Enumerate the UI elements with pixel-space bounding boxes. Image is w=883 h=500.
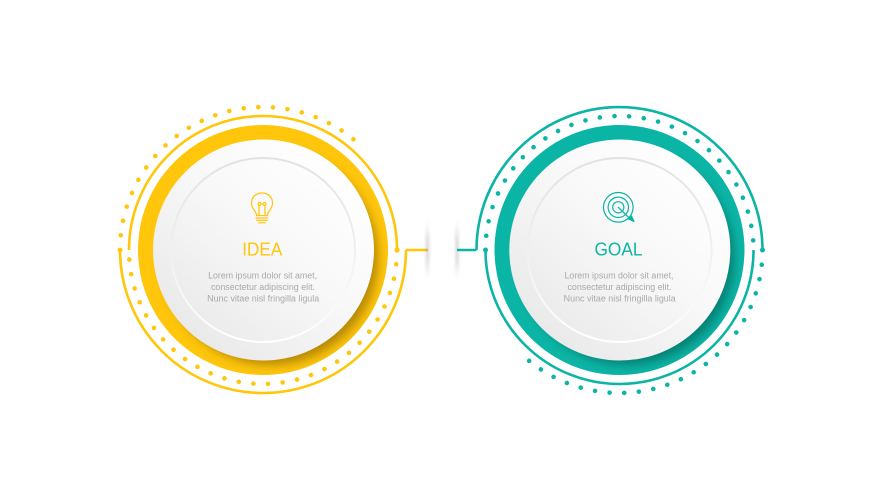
text block: goal description: Nunc vitae nisl fringilla ligula bbox=[564, 293, 676, 303]
lower arc end dot bbox=[483, 248, 488, 252]
panel: idea bbox=[118, 107, 428, 393]
disc shadow bbox=[536, 169, 740, 370]
icon: target with arrow bbox=[604, 192, 634, 222]
teal ring bbox=[494, 125, 744, 375]
lower arc end dot bbox=[118, 248, 122, 252]
text block: goal description bbox=[564, 271, 676, 303]
connector line right bbox=[457, 249, 476, 251]
lower teal arc bbox=[486, 250, 754, 384]
heading: idea: IDEA bbox=[242, 239, 283, 260]
connector line left bbox=[406, 249, 428, 251]
disc shadow bbox=[164, 151, 378, 365]
text block: goal description: Lorem ipsum dolor sit amet, bbox=[564, 271, 674, 281]
heading: goal: GOAL bbox=[594, 239, 642, 260]
text block: idea description bbox=[207, 271, 319, 303]
upper arc end dot bbox=[760, 248, 765, 252]
white disc bbox=[509, 140, 730, 360]
center gap shadows bbox=[426, 232, 458, 268]
outer dotted arc bbox=[529, 265, 762, 393]
outer dotted arc bbox=[121, 107, 364, 235]
yellow ring bbox=[138, 125, 388, 375]
text block: idea description: consectetur adipiscing elit. bbox=[211, 282, 315, 292]
text block: idea description: Nunc vitae nisl fringilla ligula bbox=[207, 293, 319, 303]
text block: goal description: consectetur adipiscing elit. bbox=[568, 282, 672, 292]
panel: goal bbox=[457, 107, 765, 393]
inner dotted arc bbox=[486, 116, 753, 241]
inner dotted arc bbox=[129, 259, 396, 384]
infographic bbox=[118, 104, 765, 396]
upper arc end dot bbox=[394, 247, 400, 253]
inner rim bbox=[171, 158, 355, 342]
icon: light bulb bbox=[252, 193, 272, 223]
upper yellow arc bbox=[129, 116, 397, 250]
text block: idea description: Lorem ipsum dolor sit amet, bbox=[208, 271, 317, 281]
lower yellow arc bbox=[120, 250, 406, 393]
inner rim bbox=[528, 158, 712, 342]
upper teal arc bbox=[476, 107, 762, 250]
white disc bbox=[153, 140, 374, 360]
